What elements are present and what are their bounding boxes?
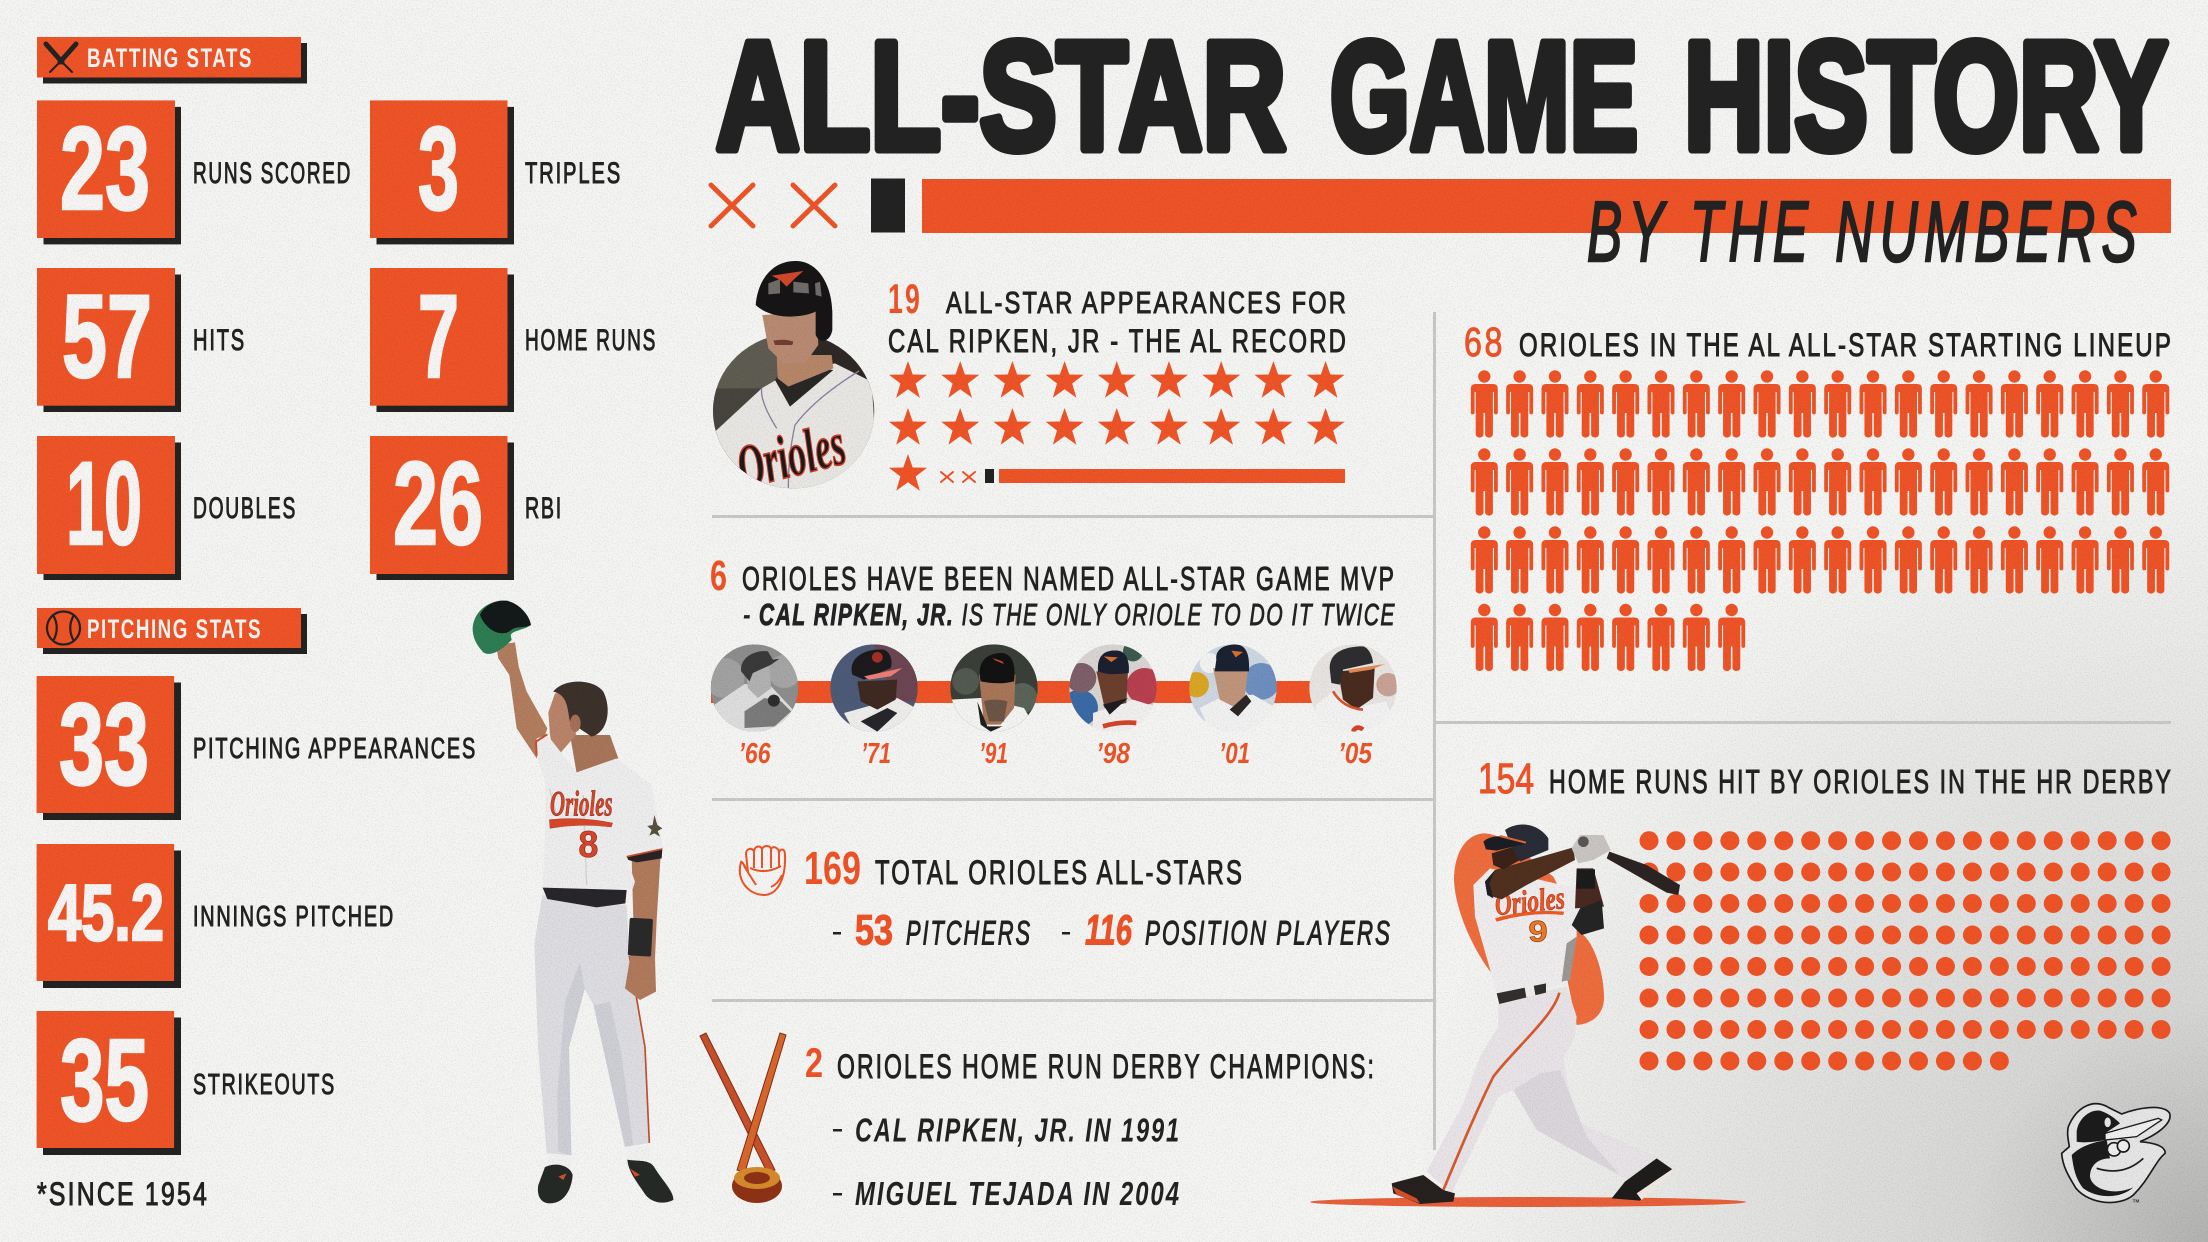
text: Ripken 1991: CAL RIPKEN, JR. IN 1991 — [855, 1112, 1181, 1148]
stat: 169: 169 — [804, 842, 861, 894]
patch — [647, 815, 662, 837]
year labels: ’98 — [1096, 738, 1131, 770]
mini bar — [941, 469, 1345, 483]
stat: 7 home runs: HOME RUNS — [525, 324, 657, 357]
dot grid: 154 home runs — [1640, 831, 2171, 1070]
text: total: TOTAL ORIOLES ALL-STARS — [875, 854, 1244, 892]
jersey script: Orioles — [550, 784, 613, 824]
stat: 3 triples: 3 — [418, 103, 459, 235]
photo: 1971 MVP — [830, 644, 918, 732]
forearm and hand — [625, 855, 661, 1000]
cleats — [1392, 1175, 1455, 1204]
stat: 53 pitchers: PITCHERS — [906, 914, 1032, 952]
stat: 35 strikeouts: STRIKEOUTS — [193, 1069, 336, 1101]
stat: 154: 154 — [1478, 755, 1534, 803]
helmet — [1505, 825, 1548, 862]
panel: total all-stars — [740, 842, 1392, 954]
neck and face — [570, 735, 618, 773]
photo: 1998 MVP — [1069, 644, 1157, 732]
stat: 45.2 innings pitched — [37, 844, 395, 988]
stat: 2: 2 — [805, 1039, 823, 1086]
photo: 2005 MVP — [1309, 644, 1400, 732]
stat: 33 pitching appearances: PITCHING APPEARANCES — [193, 733, 477, 765]
logo: cartoon bird — [2062, 1104, 2170, 1204]
hair — [553, 682, 608, 737]
icon: crossed bats — [46, 44, 76, 72]
year labels: ’66 — [738, 738, 771, 770]
stars: 19 all-star appearances — [889, 361, 1345, 491]
stat: 10 doubles: 10 — [66, 438, 142, 570]
stat: 57 hits: HITS — [193, 324, 246, 357]
timeline bar — [711, 681, 1321, 703]
panel: Ripken 19 appearances — [705, 261, 1348, 502]
photo: 1966 MVP — [705, 644, 801, 732]
text: appearances line: ALL-STAR APPEARANCES FOR — [946, 285, 1348, 320]
year labels: ’01 — [1219, 738, 1250, 770]
panel: derby champions — [700, 1033, 1376, 1212]
stat: 116 position players: POSITION PLAYERS — [1145, 914, 1392, 952]
jersey script: Orioles — [1493, 880, 1566, 922]
footnote: *SINCE 1954 — [37, 1176, 209, 1212]
stat: 23 runs scored: 23 — [60, 103, 150, 235]
stat: 23 runs scored: RUNS SCORED — [193, 157, 352, 190]
stat: 57 hits: 57 — [62, 271, 152, 403]
jersey — [1473, 868, 1577, 993]
stat: 26 rbi: RBI — [525, 492, 563, 525]
text: Tejada 2004: MIGUEL TEJADA IN 2004 — [855, 1175, 1181, 1212]
heading: batting stats: BATTING STATS — [87, 43, 253, 73]
panel: HR derby — [1310, 755, 2173, 1207]
trademark: TM — [2133, 1199, 2140, 1204]
title: GAME — [1330, 10, 1638, 182]
gloves — [1572, 835, 1611, 863]
stat: 53 pitchers — [833, 906, 1032, 954]
front arm — [1485, 847, 1575, 899]
helmet — [756, 261, 832, 341]
face — [1492, 847, 1520, 869]
belt — [1497, 983, 1546, 1004]
panel: MVPs — [705, 552, 1400, 770]
panel: starting lineup — [1464, 319, 2173, 671]
stat: 45.2 innings pitched: 45.2 — [48, 868, 164, 957]
title — [716, 10, 2168, 182]
stat: 35 strikeouts: 35 — [60, 1015, 149, 1145]
year labels: ’05 — [1338, 738, 1373, 770]
bat — [1607, 852, 1680, 895]
pant stripe — [1443, 993, 1559, 1190]
stat: 3 triples: TRIPLES — [525, 157, 622, 190]
socks and shoes — [548, 1147, 649, 1168]
stat: 7 home runs: 7 — [418, 271, 459, 403]
stat: 57 hits — [37, 268, 246, 412]
stat: 26 rbi: 26 — [393, 438, 483, 570]
stat: 26 rbi — [370, 436, 563, 580]
stat: 10 doubles: DOUBLES — [193, 492, 297, 525]
stat: 116 position players — [1062, 906, 1392, 954]
stat: 53 pitchers: 53 — [855, 906, 893, 954]
backdrop blob — [1454, 833, 1604, 1025]
jersey — [537, 735, 663, 889]
jersey number: 8 — [578, 824, 598, 865]
cap — [473, 601, 531, 654]
section banner: batting stats — [37, 37, 307, 84]
heading: pitching stats: PITCHING STATS — [87, 614, 262, 644]
ground shadow — [1310, 1197, 1746, 1207]
text: champions: ORIOLES HOME RUN DERBY CHAMPIONS: — [837, 1048, 1376, 1086]
back arm — [1575, 868, 1604, 908]
text: Ripken note: - CAL RIPKEN, JR. IS THE ONLY ORIOLE TO DO IT TWICE — [743, 597, 1396, 632]
stat: 10 doubles — [37, 436, 297, 580]
stat: 35 strikeouts — [37, 1011, 336, 1155]
pictogram: 68 players — [1471, 370, 2169, 671]
text: record line: CAL RIPKEN, JR - THE AL RECORD — [888, 323, 1348, 359]
photo: Cal Ripken portrait — [713, 261, 874, 488]
belt — [543, 888, 627, 907]
stat: 116 position players: 116 — [1085, 906, 1133, 954]
stat: 33 pitching appearances: 33 — [59, 679, 149, 809]
photo: Cal Ripken tipping cap — [473, 601, 673, 1203]
year labels — [738, 738, 1373, 770]
decorative strikes and bar — [711, 178, 2171, 233]
icon: trophy bats — [700, 1033, 786, 1203]
jersey number: 9 — [1528, 916, 1548, 949]
section banner: pitching stats — [37, 608, 307, 654]
icon: baseball — [47, 612, 80, 644]
year labels: ’91 — [979, 738, 1008, 770]
raised arm — [496, 642, 547, 758]
photo: 2001 MVP — [1184, 644, 1280, 732]
stat: 23 runs scored — [37, 100, 352, 244]
jersey script: Orioles — [730, 410, 852, 502]
stat: 33 pitching appearances — [37, 676, 477, 820]
photo: 1991 MVP — [950, 644, 1038, 732]
year labels: ’71 — [861, 738, 891, 770]
icon: glove — [740, 846, 785, 895]
text: MVP headline: ORIOLES HAVE BEEN NAMED ALL-STAR GAME MVP — [742, 560, 1396, 597]
stat: 3 triples — [370, 100, 622, 244]
photo: batter swinging — [1392, 825, 1680, 1204]
stat: 7 home runs — [370, 268, 657, 412]
pants — [534, 895, 649, 1155]
stat: 6: 6 — [710, 552, 727, 600]
title: ALL-STAR — [716, 10, 1286, 182]
stat: 45.2 innings pitched: INNINGS PITCHED — [193, 901, 395, 933]
stat: 68: 68 — [1464, 319, 1505, 365]
pants — [1427, 987, 1657, 1193]
stat: 19: 19 — [888, 275, 922, 322]
